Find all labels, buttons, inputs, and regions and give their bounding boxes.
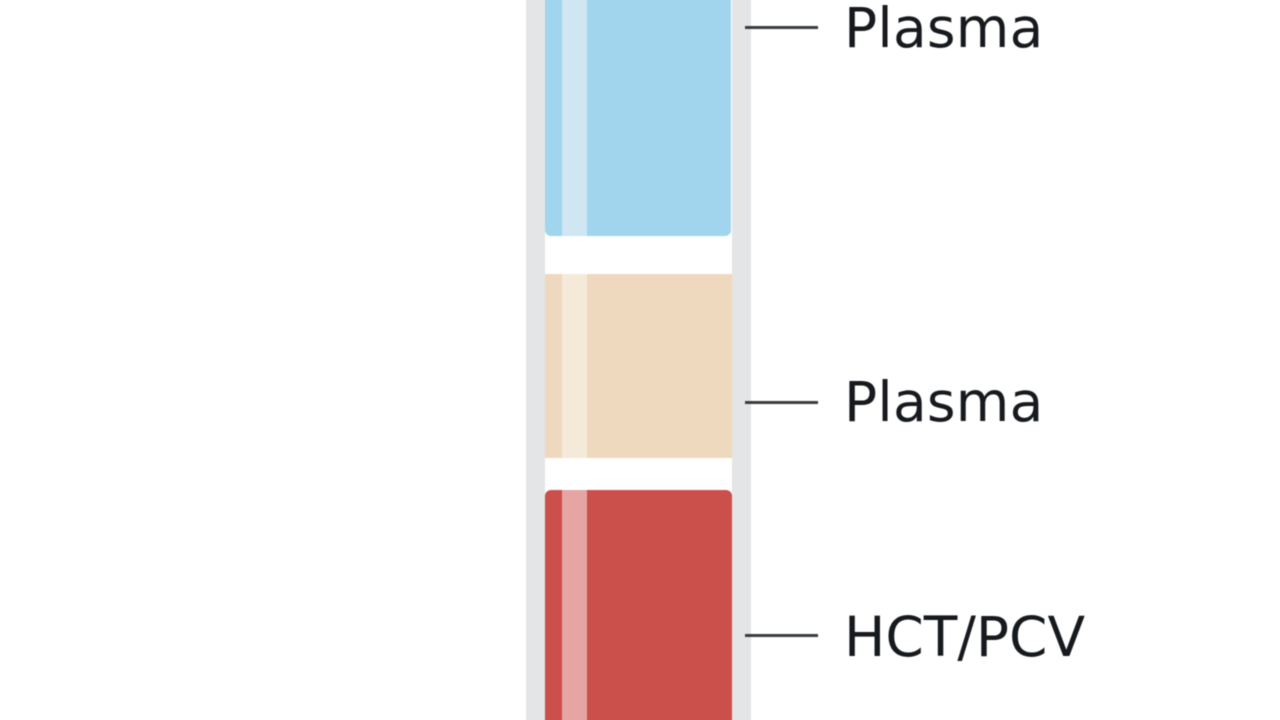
label: middle plasma: Plasma	[844, 370, 1044, 434]
highlight: red layer	[562, 490, 587, 720]
leader line: middle plasma	[745, 401, 818, 404]
highlight: beige layer	[562, 274, 587, 458]
layer: blue plasma	[545, 0, 731, 236]
layer: red cells	[545, 490, 732, 720]
layer: beige plasma	[545, 274, 732, 458]
label: HCT/PCV: HCT/PCV	[844, 605, 1085, 669]
highlight: blue layer	[562, 0, 587, 236]
leader line: HCT/PCV	[745, 634, 818, 637]
tube interior	[545, 0, 732, 720]
leader line: top plasma	[745, 26, 818, 29]
tube walls	[526, 0, 751, 720]
test tube diagram	[526, 0, 752, 720]
